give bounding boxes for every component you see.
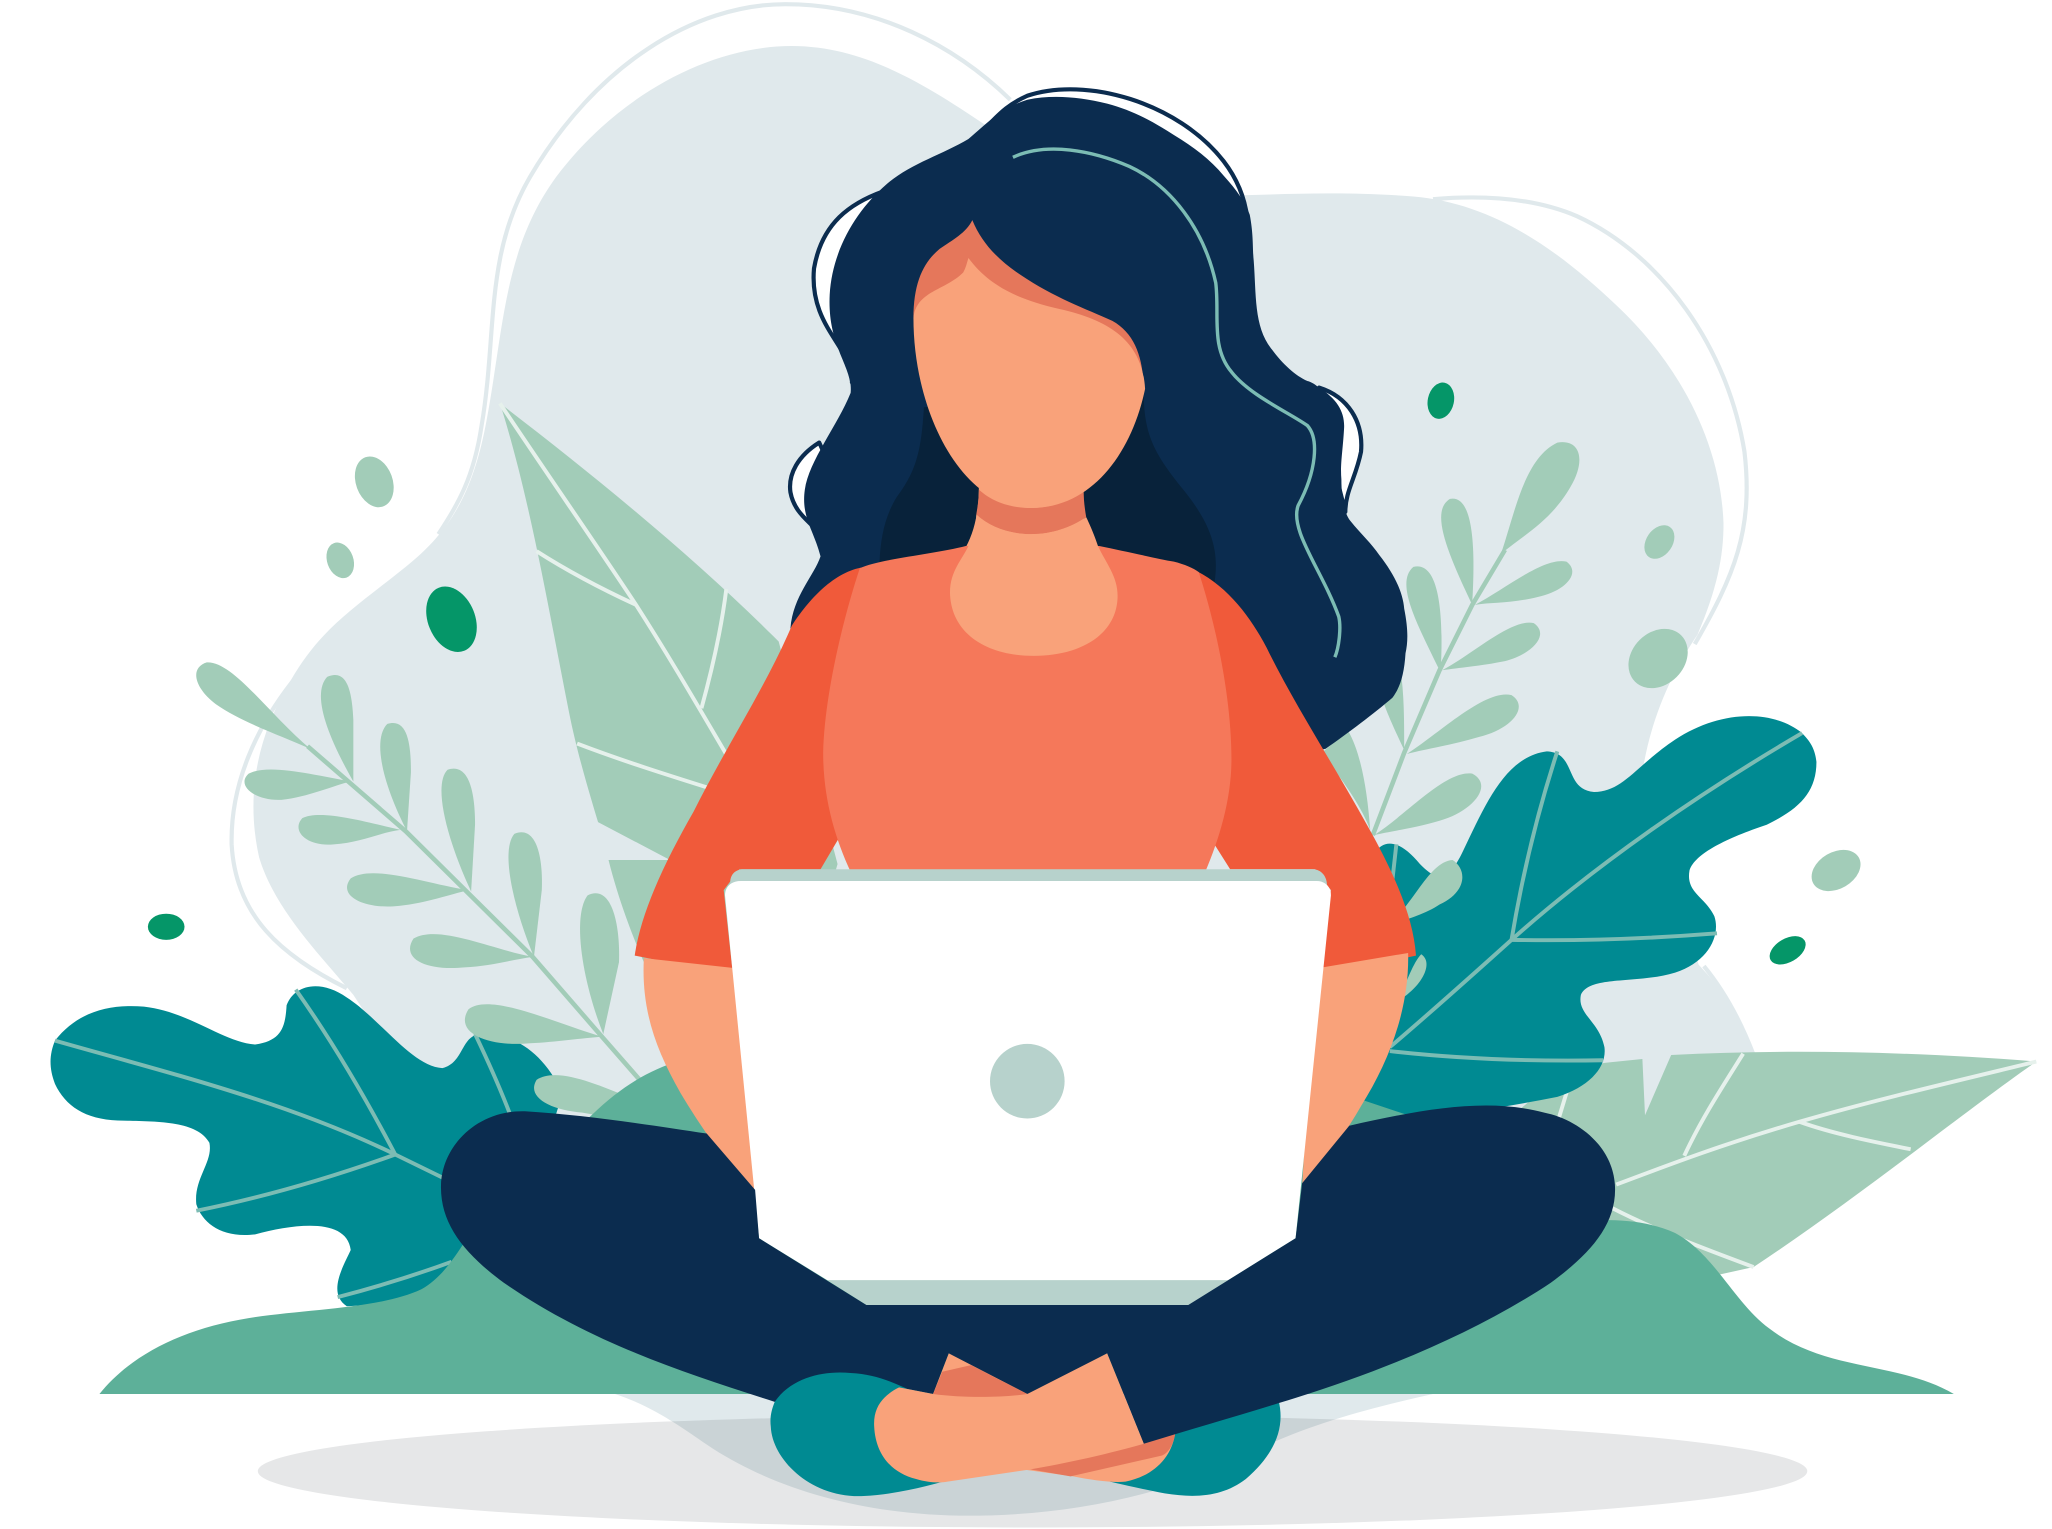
neck shadow: [976, 490, 1086, 534]
teal leaf right: [1322, 716, 1816, 1126]
right foot shadow: [1026, 1433, 1175, 1476]
green ground hill: [99, 1060, 1954, 1394]
woman: [441, 89, 1615, 1496]
teal left shoe: [770, 1372, 962, 1496]
crossed legs: [441, 1106, 1615, 1444]
laptop back edge: [726, 869, 1327, 895]
face: [913, 258, 1145, 508]
left sleeve: [635, 567, 916, 974]
large pale leaf right: [1440, 1052, 2036, 1296]
teal right shoe: [1099, 1401, 1281, 1496]
shirt front: [823, 546, 1231, 872]
hair outline strands: [790, 89, 1361, 546]
crossed foot skin: [874, 1353, 1144, 1482]
scattered pale dots: [322, 451, 1868, 899]
laptop lid: [725, 881, 1331, 1305]
hair highlight: [1013, 149, 1340, 657]
teal leaf left: [51, 986, 563, 1306]
laptop logo: [990, 1044, 1065, 1118]
laptop base strip: [827, 1280, 1230, 1305]
forehead shadow: [913, 220, 1144, 393]
arm skin left: [644, 958, 756, 1194]
background blob with outline rings: [232, 4, 1754, 1516]
right sleeve: [1152, 566, 1416, 973]
ankle shadow: [933, 1365, 1027, 1397]
arm skin right: [1302, 953, 1408, 1186]
hair: [790, 97, 1407, 812]
left branch with leaflets: [196, 662, 674, 1123]
large pale leaf left: [500, 403, 838, 1047]
neckline skin: [950, 515, 1118, 656]
ground shadow ellipse: [258, 1415, 1807, 1527]
hair shadow behind neck: [879, 394, 1216, 583]
right foot skin: [1026, 1427, 1175, 1482]
scattered green dots: [148, 380, 1811, 970]
right branch with leaflets: [1322, 442, 1579, 1001]
laptop: [725, 869, 1331, 1305]
neck: [966, 484, 1086, 547]
